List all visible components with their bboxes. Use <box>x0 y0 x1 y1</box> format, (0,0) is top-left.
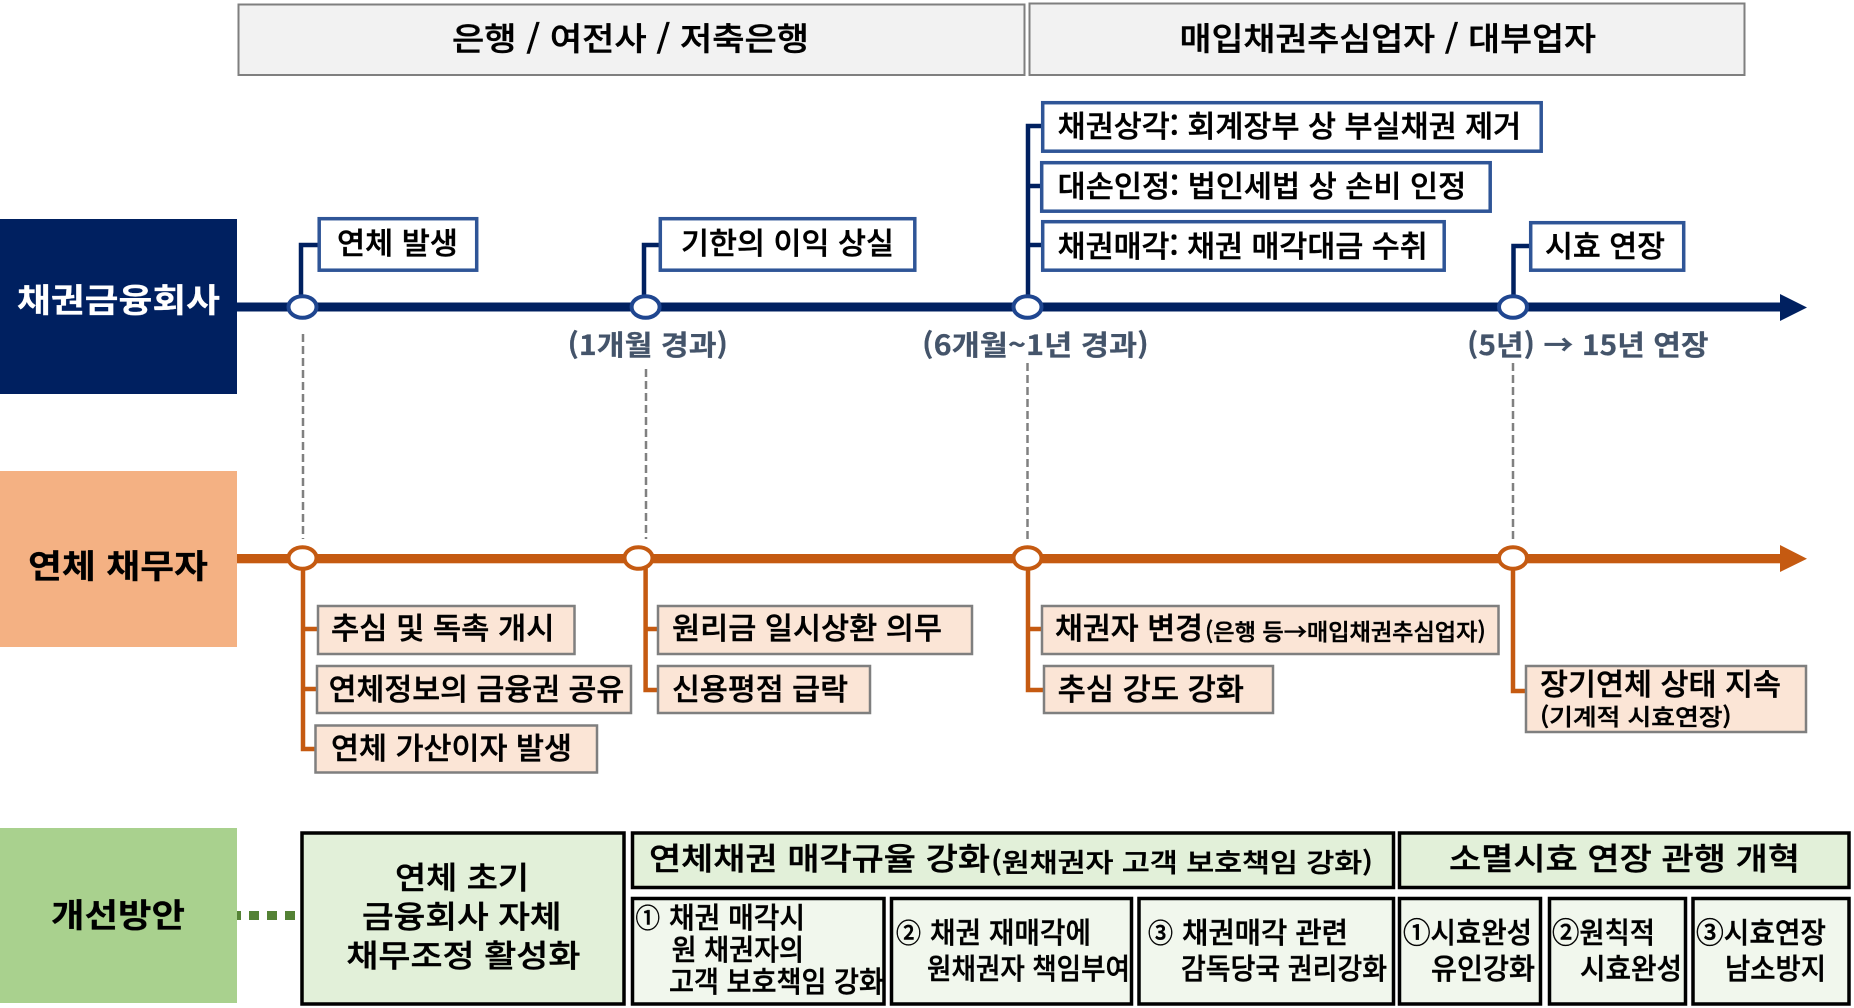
sub-box: completion incentive: ①시효완성 <box>1403 910 1532 952</box>
header: debt collectors <box>1030 4 1744 75</box>
callout: delinquency occurs <box>319 219 477 270</box>
sub-box: supervisory authority: 채권매각 관련 <box>1182 910 1348 952</box>
sub-box: principled completion: ②원칙적 <box>1552 910 1655 952</box>
sub-box: resale responsibility <box>892 898 1132 1004</box>
box: late interest: 연체 가산이자 발생 <box>331 724 572 768</box>
sub-box: seller responsibility: 고객 보호책임 강화 <box>669 959 884 1001</box>
dotted link to improvements <box>237 911 296 920</box>
time label: 6 months to 1 year: (6개월~1년 경과) <box>922 324 1149 364</box>
sub-box: supervisory authority: 감독당국 권리강화 <box>1181 946 1387 988</box>
box: early debt adjustment: 연체 초기 <box>395 853 529 898</box>
row label: creditor: 채권금융회사 <box>17 274 220 322</box>
debtor connectors <box>303 568 1526 749</box>
sub-box: seller responsibility <box>632 895 884 1004</box>
box: lump-sum repayment: 원리금 일시상환 의무 <box>672 604 942 648</box>
callout: loss of term benefit: 기한의 이익 상실 <box>681 219 894 263</box>
sub-box: principled completion <box>1550 898 1686 1004</box>
box: reform prescription: 소멸시효 연장 관행 개혁 <box>1449 834 1800 879</box>
box: credit information sharing: 연체정보의 금융권 공유 <box>329 665 624 709</box>
box: stronger collection: 추심 강도 강화 <box>1058 665 1244 709</box>
creditor connectors <box>301 126 1530 297</box>
time label: 5 to 15 years: (5년) → 15년 연장 <box>1467 324 1708 364</box>
box: early debt adjustment <box>302 833 624 1004</box>
box: strengthen sale rules: (원채권자 고객 보호책임 강화) <box>991 843 1373 880</box>
debtor milestones <box>288 547 1527 569</box>
callout: write-off: 채권상각: 회계장부 상 부실채권 제거 <box>1058 102 1521 146</box>
box: credit score drop: 신용평점 급락 <box>672 665 848 709</box>
row label: debtor <box>0 471 237 647</box>
sub-box: supervisory authority: ③ <box>1148 912 1173 951</box>
callout: debt sale: 채권매각: 채권 매각대금 수취 <box>1058 222 1428 266</box>
sub-box: seller responsibility: 원 채권자의 <box>672 927 804 969</box>
box: long-term delinquency: 장기연체 상태 지속 <box>1540 660 1781 704</box>
row label: creditor <box>0 219 237 394</box>
callout: delinquency occurs: 연체 발생 <box>337 219 458 263</box>
sub-box: seller responsibility: 채권 매각시 <box>669 895 805 937</box>
debtor timeline arrow <box>237 545 1807 572</box>
sub-box: resale responsibility: 채권 재매각에 <box>930 910 1091 952</box>
header: banks <box>238 4 1024 75</box>
box: creditor change <box>1042 604 1498 654</box>
box: creditor change: (은행 등→매입채권추심업자) <box>1205 613 1486 647</box>
row label: improvement: 개선방안 <box>51 889 185 937</box>
sub-box: supervisory authority <box>1139 898 1394 1004</box>
header: banks: 은행 / 여전사 / 저축은행 <box>452 14 809 60</box>
sub-box: abuse prevention: ③시효연장 <box>1696 910 1826 952</box>
box: long-term delinquency: (기계적 시효연장) <box>1540 698 1732 732</box>
dashed guides <box>303 334 1513 540</box>
sub-box: resale responsibility: 원채권자 책임부여 <box>927 946 1130 988</box>
header: debt collectors: 매입채권추심업자 / 대부업자 <box>1180 14 1596 60</box>
creditor timeline arrow <box>237 294 1807 321</box>
box: reform prescription <box>1400 833 1849 888</box>
sub-box: seller responsibility: ① <box>636 897 660 936</box>
box: strengthen sale rules <box>632 833 1394 888</box>
sub-box: abuse prevention <box>1693 898 1849 1004</box>
callout: bad debt recognition: 대손인정: 법인세법 상 손비 인정 <box>1058 162 1466 206</box>
box: early debt adjustment: 금융회사 자체 <box>362 892 562 937</box>
box: collection begins: 추심 및 독촉 개시 <box>331 604 554 648</box>
sub-box: abuse prevention: 남소방지 <box>1725 946 1826 988</box>
time label: 1 month: (1개월 경과) <box>568 324 728 364</box>
sub-box: completion incentive <box>1400 898 1540 1004</box>
box: early debt adjustment: 채무조정 활성화 <box>346 931 580 976</box>
box: strengthen sale rules: 연체채권 매각규율 강화 <box>649 834 990 879</box>
creditor milestones <box>288 296 1527 318</box>
sub-box: completion incentive: 유인강화 <box>1431 946 1535 988</box>
row label: improvement <box>0 828 237 1003</box>
box: long-term delinquency <box>1526 660 1806 732</box>
box: creditor change: 채권자 변경 <box>1055 604 1203 648</box>
callout: prescription extension: 시효 연장 <box>1545 222 1665 266</box>
sub-box: resale responsibility: ② <box>896 912 921 951</box>
row label: debtor: 연체 채무자 <box>28 540 208 588</box>
sub-box: principled completion: 시효완성 <box>1580 946 1682 988</box>
